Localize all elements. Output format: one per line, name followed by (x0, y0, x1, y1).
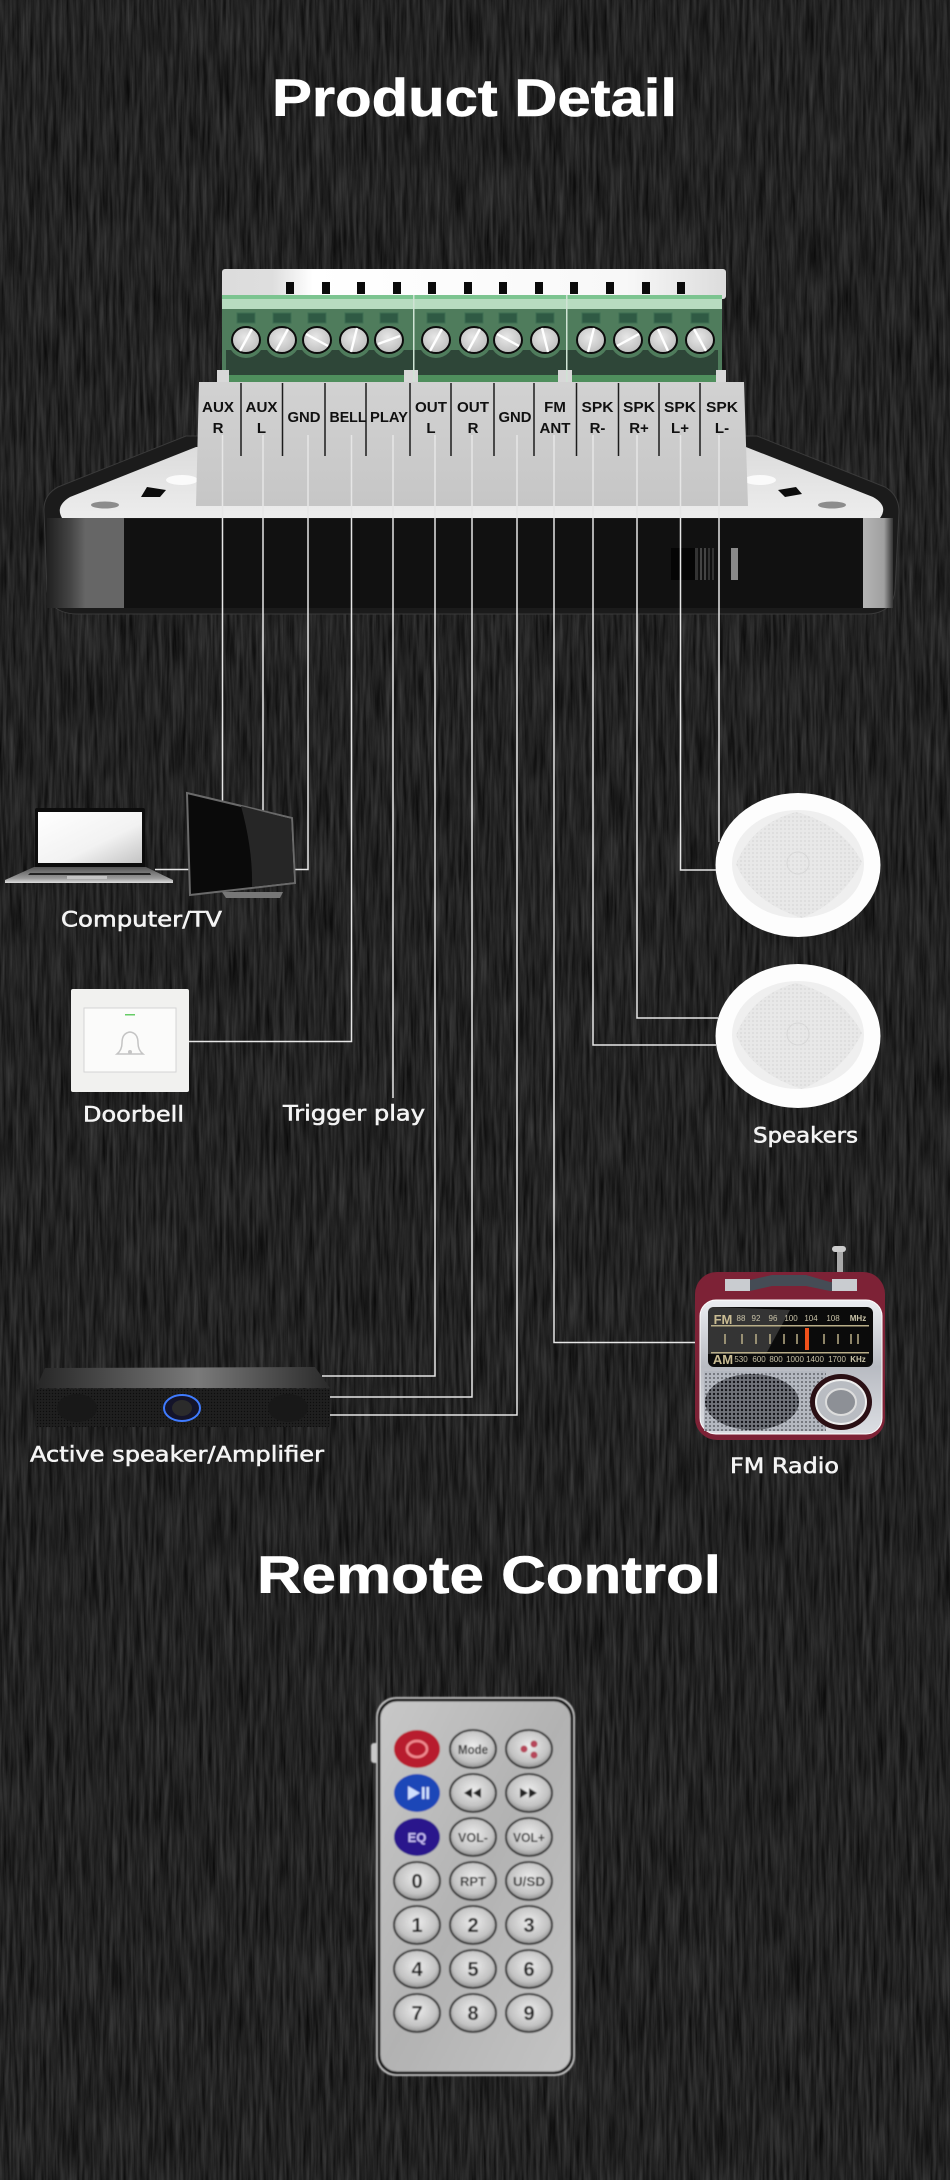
port label: AUX L: AUX (246, 399, 278, 416)
button: U/SD (506, 1862, 552, 1900)
port label: FM ANT: ANT (540, 420, 570, 437)
caption: Computer/TV: Computer/TV (61, 908, 223, 932)
button: 3 (506, 1906, 552, 1944)
button: RPT: RPT (460, 1874, 486, 1889)
label panel (196, 382, 748, 506)
tuning display: 92 (752, 1314, 761, 1323)
title: Remote Control: Remote Control (257, 1546, 721, 1605)
wire: AUX R to TV (222, 435, 224, 808)
tuning display: 1400 (806, 1355, 824, 1364)
icon: doorbell switch (71, 989, 189, 1092)
wire: PLAY to trigger (392, 435, 394, 1098)
connection wires (155, 435, 719, 1415)
button: 6: 6 (523, 1959, 535, 1981)
port label: BELL: BELL (330, 409, 366, 426)
icon: laptop (5, 808, 173, 883)
port label: SPK L+: SPK (664, 399, 696, 416)
button: power (394, 1730, 440, 1768)
icon: TV (187, 793, 295, 898)
caption: FM Radio: FM Radio (730, 1454, 839, 1478)
button: 8: 8 (467, 2003, 479, 2025)
button: next (506, 1774, 552, 1812)
button: 7: 7 (411, 2003, 423, 2025)
button: 1: 1 (411, 1915, 423, 1937)
wire: GND to amplifier (327, 435, 517, 1415)
tuning display: 1000 (786, 1355, 804, 1364)
wire: SPK L- to speaker (718, 435, 720, 842)
button: 2 (450, 1906, 496, 1944)
button: 5: 5 (467, 1959, 479, 1981)
wire: laptop to TV (155, 868, 189, 870)
port label: GND: GND (498, 409, 532, 426)
button: VOL- (450, 1818, 496, 1856)
button: 6 (506, 1950, 552, 1988)
port label: OUT R: R (468, 420, 479, 437)
port label: SPK R-: SPK (582, 399, 614, 416)
button: 1 (394, 1906, 440, 1944)
port label: SPK R+: SPK (623, 399, 655, 416)
antenna (832, 1246, 846, 1282)
port label: GND: GND (288, 409, 321, 426)
button: U/SD: U/SD (513, 1874, 545, 1889)
button: mode (450, 1730, 496, 1768)
tuning display: 800 (769, 1355, 783, 1364)
button: 8 (450, 1994, 496, 2032)
tuning display: 600 (752, 1355, 766, 1364)
button: 3: 3 (523, 1915, 535, 1937)
button: 5 (450, 1950, 496, 1988)
button: RPT (450, 1862, 496, 1900)
port label: AUX R: R (213, 420, 224, 437)
tuning display (708, 1307, 873, 1367)
port label: SPK R-: R- (590, 420, 605, 437)
caption: Speakers: Speakers (753, 1124, 858, 1148)
port label: PLAY: PLAY (370, 409, 408, 426)
wire: OUT L to amplifier (322, 435, 435, 1376)
button: previous (450, 1774, 496, 1812)
tuning dial (810, 1374, 872, 1430)
wire: BELL to doorbell (189, 435, 352, 1042)
tuning display: 96 (769, 1314, 778, 1323)
tuning display: 108 (826, 1314, 840, 1323)
port label: OUT L: OUT (415, 399, 447, 416)
button: 9: 9 (523, 2003, 535, 2025)
button: mode: Mode (458, 1742, 488, 1757)
button: 2: 2 (467, 1915, 479, 1937)
button: EQ (394, 1818, 440, 1856)
port label: AUX L: L (257, 420, 266, 437)
button: EQ: EQ (408, 1830, 426, 1845)
tuning display: 1700 (828, 1355, 846, 1364)
caption: Active speaker/Amplifier: Active speaker/Amplifier (30, 1442, 324, 1466)
wire: AUX L to TV (262, 435, 264, 818)
button: VOL+ (506, 1818, 552, 1856)
button: 4 (394, 1950, 440, 1988)
tuning display: MHz (850, 1314, 866, 1323)
tuning display: 100 (784, 1314, 798, 1323)
caption: Doorbell: Doorbell (83, 1102, 184, 1126)
button: play/pause (394, 1774, 440, 1812)
wire: OUT R to amplifier (330, 435, 472, 1397)
port label: SPK L+: L+ (671, 420, 689, 437)
device: amplifier body and base plate (44, 436, 899, 614)
button: 7 (394, 1994, 440, 2032)
caption: Trigger play: Trigger play (282, 1102, 425, 1126)
wire: SPK L+ to speaker (680, 435, 716, 870)
wire: SPK R+ to speaker (637, 435, 718, 1018)
port label: AUX R: AUX (202, 399, 234, 416)
port label: FM ANT: FM (544, 399, 566, 416)
button: 4: 4 (411, 1959, 423, 1981)
port label: SPK L-: SPK (706, 399, 738, 416)
icon: ceiling speaker top (716, 793, 880, 937)
tuning display: FM (714, 1312, 732, 1327)
button: 0: 0 (411, 1871, 423, 1893)
terminal block: green connectors with screws (217, 295, 726, 382)
tuning display: KHz (850, 1355, 866, 1364)
port label: OUT R: OUT (457, 399, 489, 416)
slide switch (671, 548, 738, 580)
tuning display: 104 (804, 1314, 818, 1323)
button: VOL+: VOL+ (513, 1830, 545, 1845)
icon: ceiling speaker bottom (716, 964, 880, 1108)
handle (725, 1275, 857, 1291)
button: 9 (506, 1994, 552, 2032)
title: Product Detail: Product Detail (272, 69, 677, 128)
wire: SPK R- to speaker (593, 435, 716, 1045)
icon: soundbar amplifier (35, 1367, 330, 1427)
icon: FM radio (695, 1246, 885, 1440)
port label: OUT L: L (426, 420, 436, 437)
port label: SPK L-: L- (715, 420, 729, 437)
tuning display: AM (713, 1352, 733, 1367)
terminal block: white back with slots (222, 269, 726, 299)
remote control (371, 1697, 575, 2076)
tuning display: 530 (734, 1355, 748, 1364)
port label: SPK R+: R+ (629, 420, 649, 437)
speaker grille (704, 1371, 826, 1431)
button: share (506, 1730, 552, 1768)
button: 0 (394, 1862, 440, 1900)
wire: FM ANT to radio (554, 435, 696, 1342)
wire: GND to TV (290, 435, 308, 870)
tuning display: 88 (737, 1314, 746, 1323)
button: VOL-: VOL- (458, 1830, 488, 1845)
